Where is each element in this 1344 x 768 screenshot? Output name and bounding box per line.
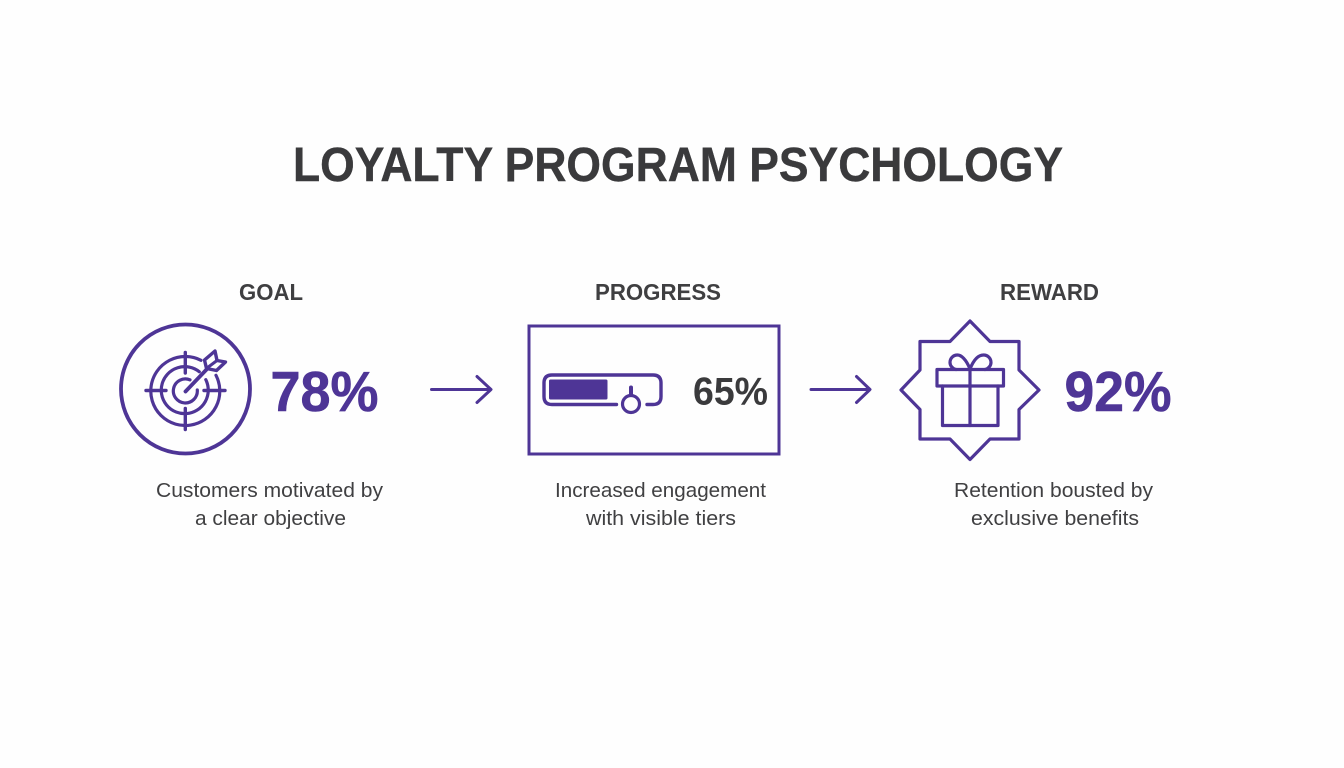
stat: 92%: 92% — [1064, 360, 1172, 424]
icon: progress bar with marker — [544, 375, 661, 412]
card frame — [529, 326, 779, 454]
description: goal: a clear objective — [195, 507, 346, 530]
description: reward — [954, 479, 1154, 530]
heading: progress: PROGRESS — [595, 279, 721, 305]
heading: reward: REWARD — [1000, 279, 1099, 305]
description: goal — [156, 479, 384, 530]
heading: goal: GOAL — [239, 279, 303, 305]
stat: 65%: 65% — [693, 370, 768, 414]
description: progress: with visible tiers — [585, 507, 736, 530]
panel: progress — [529, 279, 779, 530]
panel: reward — [901, 279, 1172, 530]
description: progress — [555, 479, 766, 530]
stat: 78%: 78% — [270, 360, 378, 424]
description: progress: Increased engagement — [555, 479, 766, 502]
arrow: progress to reward — [811, 376, 870, 402]
panel: goal — [121, 279, 384, 530]
arrow: goal to progress — [432, 376, 491, 402]
icon: gift in star badge — [901, 321, 1039, 460]
description: reward: Retention bousted by — [954, 479, 1154, 502]
description: reward: exclusive benefits — [971, 507, 1139, 530]
icon: target with arrow — [121, 324, 250, 454]
title: LOYALTY PROGRAM PSYCHOLOGY — [293, 139, 1063, 192]
description: goal: Customers motivated by — [156, 479, 384, 502]
